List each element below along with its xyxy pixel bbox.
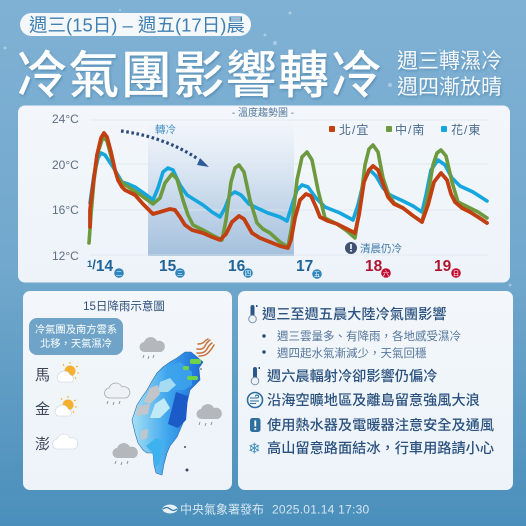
subtitle: 週三轉濕冷 — [397, 50, 502, 73]
bullets — [262, 329, 461, 360]
text: road icing: 高山留意路面結冰，行車用路請小心 — [267, 440, 494, 457]
date axis: 17 — [296, 258, 313, 275]
footer — [162, 502, 369, 516]
date axis: 18 — [365, 258, 383, 275]
rain panel heading: 15日降雨示意圖 — [83, 299, 165, 313]
rain area: gray patches — [136, 385, 160, 440]
footer: 2025.01.14 17:30 — [272, 502, 369, 516]
date axis: 14 — [96, 258, 114, 275]
text: heater safety: 使用熱水器及電暖器注意安全及通風 — [267, 417, 494, 434]
date axis: 二 — [116, 270, 123, 278]
legend: 北/宜 — [339, 122, 369, 137]
note: still cold in early morning — [345, 242, 402, 255]
y axis labels: 20°C — [52, 158, 79, 172]
text: radiative cooling: 週六晨輻射冷卻影響仍偏冷 — [267, 368, 437, 385]
icon: wind — [248, 392, 262, 408]
chart heading: - 溫度趨勢圖 - — [232, 106, 294, 119]
icon: thermometer 1 — [249, 305, 258, 323]
panel: temperature trend chart — [18, 106, 510, 282]
bullets: 週三雲量多、有降雨，各地感受濕冷 — [277, 329, 461, 343]
date axis: 日 — [453, 270, 459, 278]
heading: cold air mass: 週三至週五晨大陸冷氣團影響 — [262, 306, 446, 323]
date axis: 15 — [159, 258, 177, 275]
icon: Matsu partly sunny — [57, 362, 79, 382]
icon: snowflake: ❄ — [248, 440, 261, 458]
date axis: 三 — [177, 270, 184, 278]
panel: key points — [238, 291, 513, 490]
legend: 中/南 — [395, 122, 425, 137]
callout: 北移，天氣濕冷 — [40, 337, 112, 350]
icon: Kinmen partly sunny — [55, 396, 77, 416]
icon: north wind — [197, 339, 214, 356]
date axis: 16 — [228, 258, 246, 275]
date axis: / — [92, 257, 96, 272]
line: east — [90, 153, 487, 221]
icon: rain cloud south — [112, 443, 138, 465]
y axis labels: 12°C — [52, 249, 79, 263]
island labels: 澎 — [35, 436, 50, 453]
y axis labels: 24°C — [52, 112, 79, 126]
icon: rain cloud north — [139, 337, 165, 359]
icon: heater warning — [250, 418, 260, 432]
date pill: 週三(15日) – 週五(17日)晨 — [29, 14, 245, 36]
island labels: 金 — [35, 401, 50, 418]
arrow: turning cold — [121, 131, 209, 167]
label: turning cold: 轉冷 — [155, 123, 176, 136]
panel: rain schematic — [23, 291, 232, 490]
y axis labels — [52, 112, 79, 263]
text: strong wind: 沿海空曠地區及離島留意強風大浪 — [267, 392, 480, 409]
bullets: 週四起水氣漸減少，天氣回穩 — [277, 346, 427, 360]
date axis: 六 — [383, 268, 390, 278]
icon: Penghu cloudy — [52, 434, 78, 449]
date axis: 五 — [314, 270, 321, 278]
date axis — [87, 257, 461, 279]
note: still cold in early morning: 清晨仍冷 — [360, 242, 402, 255]
line: north — [90, 133, 487, 248]
icon: rain cloud east — [196, 404, 222, 426]
icon: rain cloud west — [104, 383, 130, 405]
map: Taiwan rainfall — [132, 352, 203, 475]
date axis: 四 — [245, 270, 251, 278]
cold period shading — [148, 122, 294, 256]
callout: 冷氣團及南方雲系 — [35, 323, 117, 336]
callout — [29, 318, 123, 355]
subtitle — [397, 50, 502, 99]
icon: CWA logo — [162, 504, 178, 514]
y axis labels: 16°C — [52, 203, 79, 217]
date axis: 19 — [434, 258, 452, 275]
legend — [329, 122, 481, 137]
icon: thermometer 2 — [251, 367, 260, 385]
line: central south — [89, 137, 487, 247]
date axis: 1 — [87, 259, 93, 270]
publisher and time: 中央氣象署發布 — [180, 502, 264, 516]
title: 冷氣團影響轉冷 — [16, 47, 383, 104]
subtitle: 週四漸放晴 — [397, 76, 502, 99]
island labels: 馬 — [35, 367, 50, 384]
island labels — [35, 367, 50, 453]
legend: 花/東 — [451, 122, 481, 137]
